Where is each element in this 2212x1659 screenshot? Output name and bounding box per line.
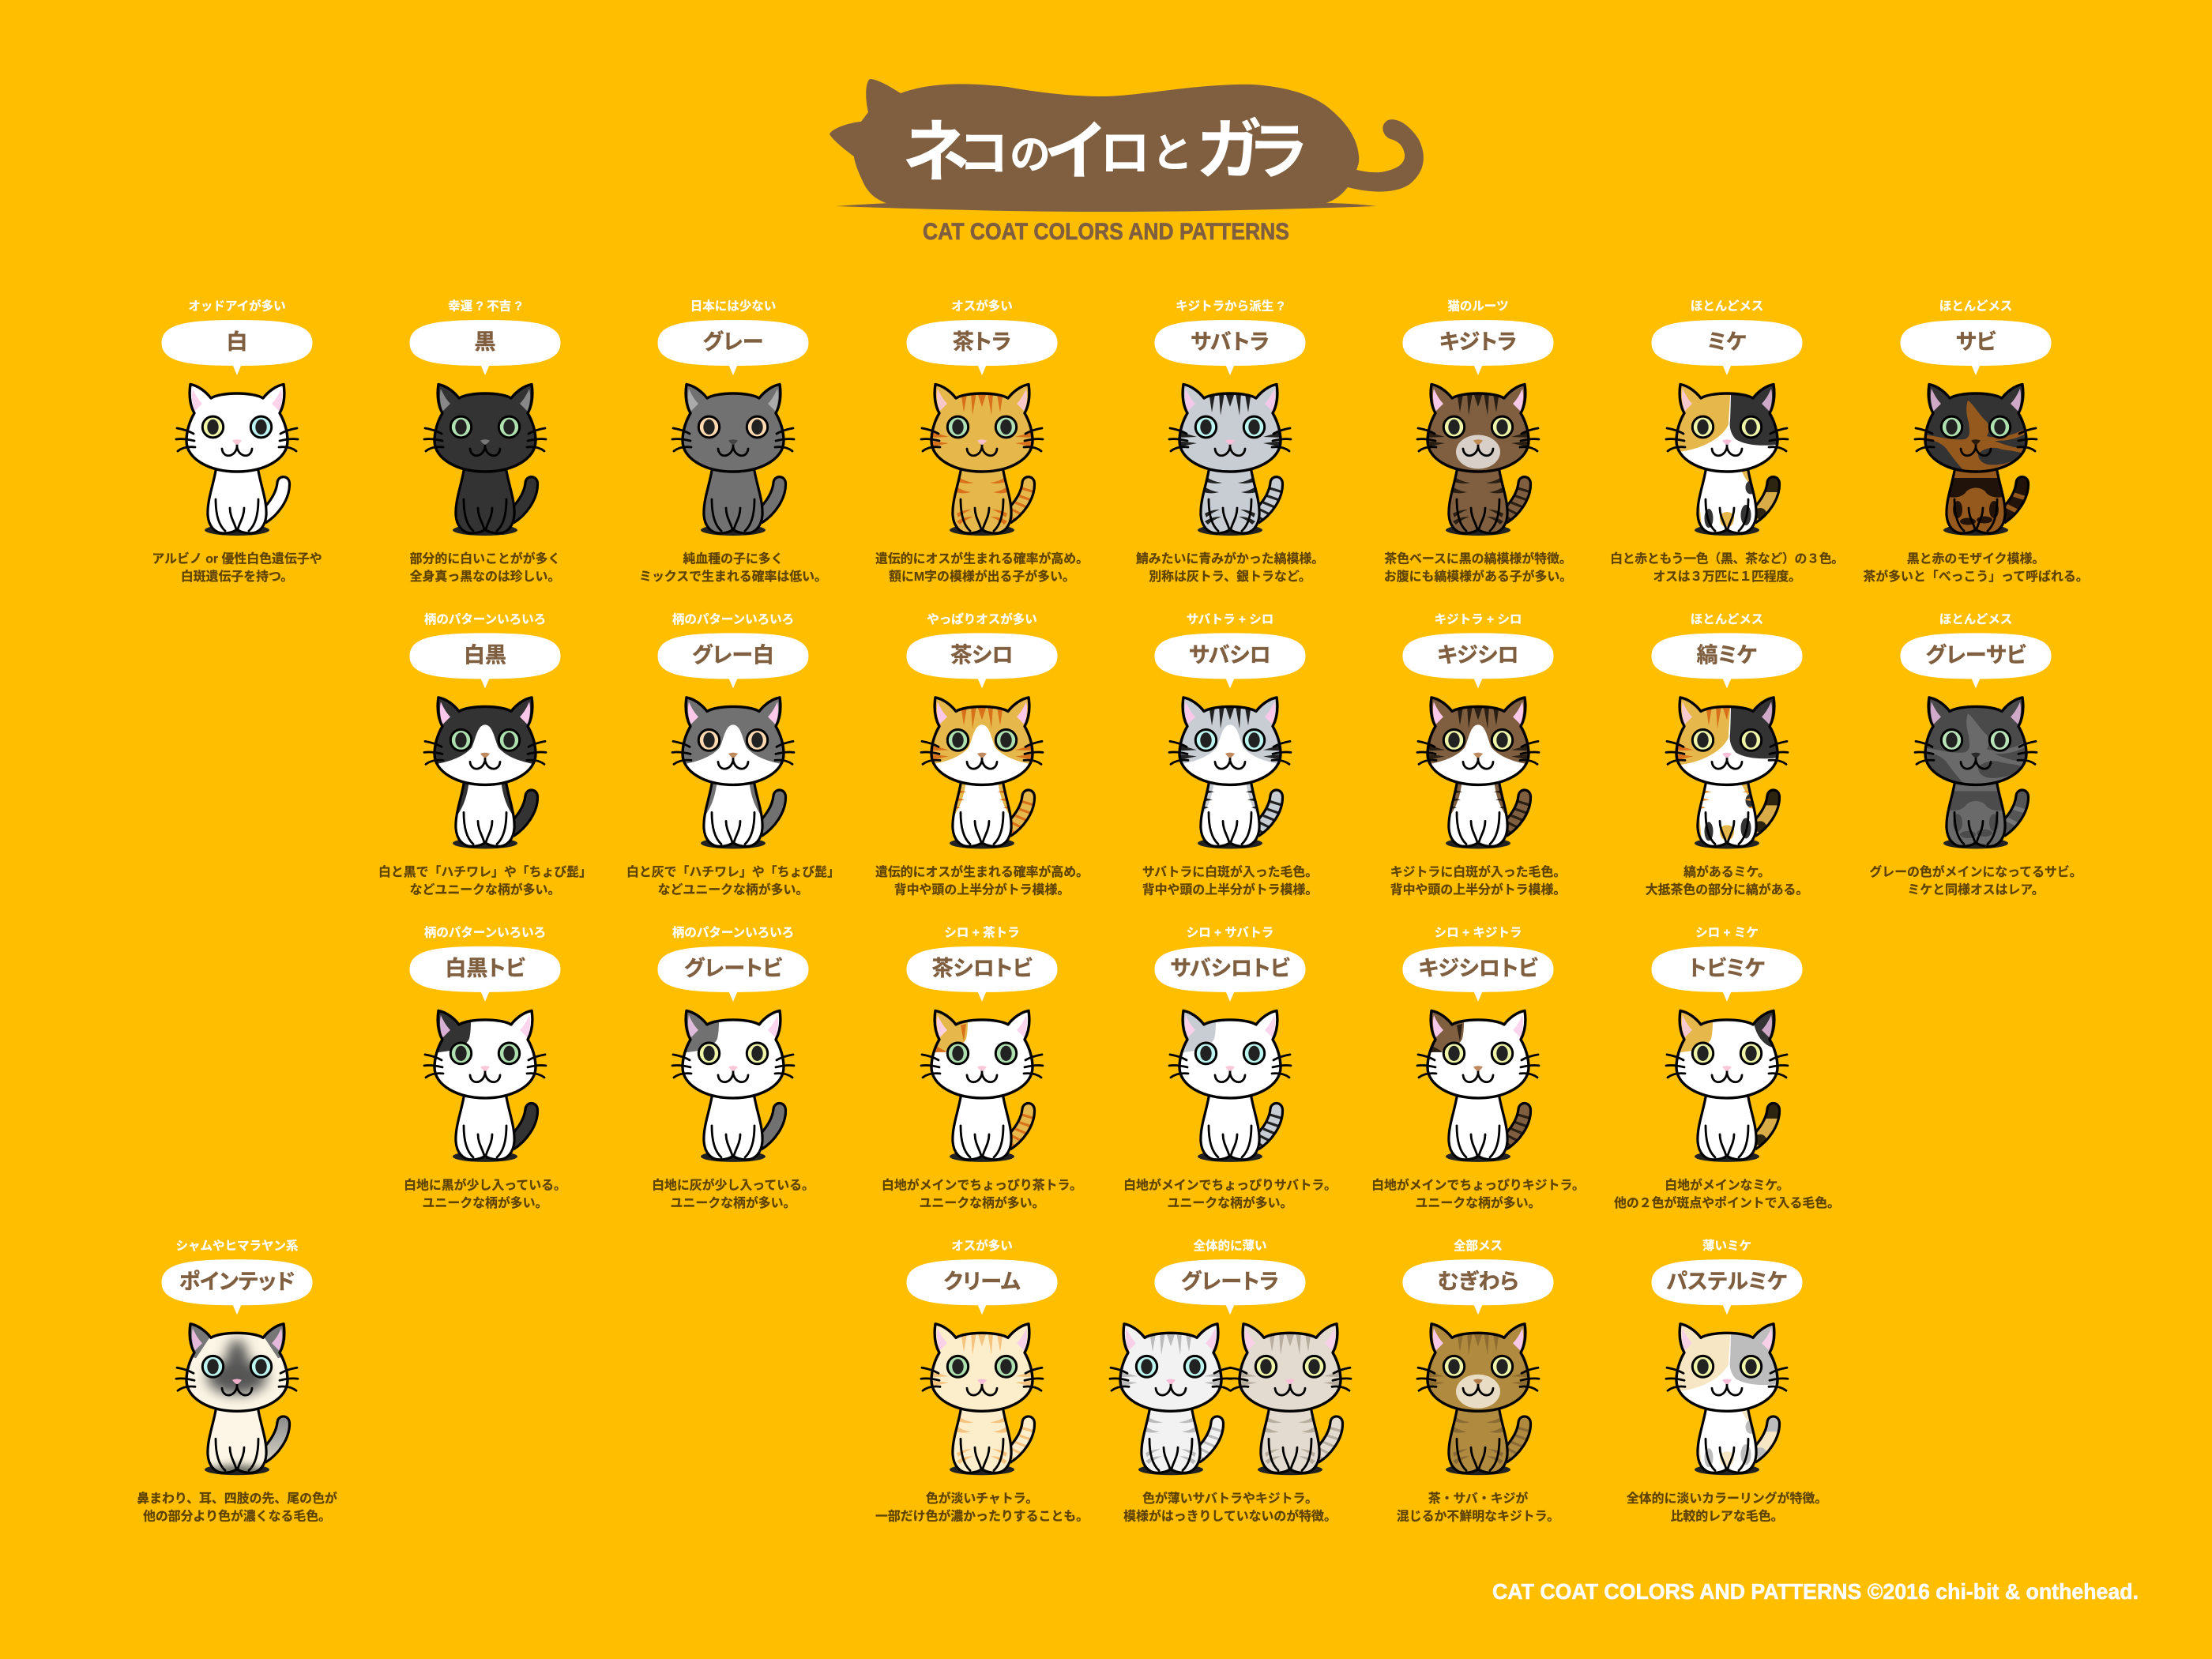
- name bubble: キジシロ: [1437, 643, 1519, 667]
- card: サビ: [1863, 299, 2089, 584]
- cat: silver tabby: [1169, 384, 1291, 536]
- name bubble: ポインテッド: [179, 1270, 295, 1293]
- subtitle: CAT COAT COLORS AND PATTERNS: [923, 219, 1289, 245]
- note: 柄のパターンいろいろ: [672, 612, 794, 626]
- note: オッドアイが多い: [188, 299, 286, 313]
- name bubble: 白黒トビ: [445, 957, 525, 980]
- description: お腹にも縞模様がある子が多い。: [1384, 569, 1572, 584]
- card: グレー白: [626, 612, 840, 897]
- name bubble: パステルミケ: [1666, 1270, 1788, 1293]
- note: ほとんどメス: [1939, 612, 2012, 626]
- card: キジシロトビ: [1371, 926, 1585, 1210]
- name bubble: [907, 946, 1057, 1002]
- description: 背中や頭の上半分がトラ模様。: [1390, 882, 1566, 897]
- cat: white with brown cap: [1417, 1006, 1539, 1162]
- name bubble: トビミケ: [1689, 957, 1765, 980]
- name bubble: キジシロトビ: [1418, 957, 1538, 980]
- description: 白と灰で「ハチワレ」や「ちょび髭」: [626, 865, 840, 879]
- name bubble: [161, 320, 313, 375]
- description: 全体的に淡いカラーリングが特徴。: [1627, 1491, 1827, 1506]
- card: グレーサビ: [1869, 612, 2082, 897]
- description: 黒と赤のモザイク模様。: [1907, 551, 2045, 566]
- name bubble: [657, 320, 809, 375]
- card: 黒: [409, 299, 561, 584]
- cat: straw tabby: [1417, 1324, 1539, 1475]
- title text: コ: [958, 113, 1009, 186]
- description: ユニークな柄が多い。: [920, 1195, 1044, 1210]
- cat: gray: [672, 384, 794, 536]
- card: 白: [152, 299, 322, 584]
- name bubble: グレー: [703, 329, 763, 354]
- note: 薄いミケ: [1702, 1239, 1751, 1253]
- card: トビミケ: [1614, 925, 1840, 1210]
- note: シロ + サバトラ: [1187, 925, 1273, 939]
- title text: ロ: [1100, 113, 1150, 186]
- note: 全部メス: [1454, 1238, 1503, 1253]
- description: 白地がメインでちょっぴり茶トラ。: [882, 1177, 1082, 1192]
- name bubble: 茶トラ: [953, 330, 1011, 354]
- description: 縞があるミケ。: [1683, 864, 1770, 879]
- name bubble: クリーム: [943, 1270, 1021, 1293]
- title text: ガ: [1196, 97, 1262, 193]
- name bubble: [1403, 1259, 1553, 1315]
- note: サバトラ + シロ: [1187, 612, 1273, 626]
- cat: pointed: [176, 1320, 298, 1482]
- description: 背中や頭の上半分がトラ模様。: [1142, 882, 1318, 897]
- cat: white with gray cap: [672, 1006, 794, 1162]
- title text: と: [1152, 120, 1193, 179]
- card: ミケ: [1610, 299, 1844, 584]
- description: 他の部分より色が濃くなる毛色。: [143, 1508, 331, 1523]
- description: ミケと同様オスはレア。: [1907, 882, 2045, 897]
- description: 茶が多いと「べっこう」って呼ばれる。: [1863, 569, 2089, 584]
- card: むぎわら: [1397, 1238, 1559, 1523]
- name bubble: [1651, 946, 1803, 1002]
- name bubble: [1155, 1259, 1305, 1315]
- description: 色が薄いサバトラやキジトラ。: [1142, 1491, 1318, 1506]
- footer credit: CAT COAT COLORS AND PATTERNS ©2016 chi-bit & onthehead.: [1492, 1579, 2139, 1604]
- card: キジトラ: [1384, 299, 1572, 584]
- description: 全身真っ黒なのは珍しい。: [410, 569, 560, 584]
- name bubble: [409, 946, 561, 1002]
- name bubble: [1901, 320, 2051, 375]
- name bubble: 白黒: [464, 643, 506, 667]
- note: オスが多い: [951, 1238, 1013, 1253]
- cat: pale silver tabby: [1110, 1324, 1232, 1475]
- description: サバトラに白斑が入った毛色。: [1142, 864, 1318, 879]
- name bubble: むぎわら: [1438, 1269, 1518, 1293]
- card: グレー: [639, 299, 827, 584]
- note: ほとんどメス: [1691, 299, 1763, 313]
- note: キジトラ + シロ: [1435, 613, 1522, 626]
- name bubble: サバシロ: [1189, 643, 1271, 667]
- note: シロ + 茶トラ: [944, 925, 1020, 939]
- card: パステルミケ: [1627, 1239, 1827, 1523]
- name bubble: [1403, 633, 1553, 688]
- card: 茶シロトビ: [882, 925, 1082, 1210]
- description: オスは３万匹に１匹程度。: [1653, 569, 1801, 584]
- description: 白地に黒が少し入っている。: [404, 1177, 566, 1192]
- note: 全体的に薄い: [1193, 1238, 1267, 1253]
- note: オスが多い: [951, 299, 1013, 313]
- name bubble: 茶シロトビ: [932, 957, 1033, 980]
- card: 白黒トビ: [404, 925, 566, 1210]
- name bubble: グレートビ: [684, 956, 783, 980]
- name bubble: グレー白: [692, 642, 774, 667]
- cat: white with orange cap: [921, 1006, 1043, 1162]
- name bubble: [907, 633, 1057, 688]
- description: 白と赤ともう一色（黒、茶など）の３色。: [1610, 551, 1844, 566]
- description: 部分的に白いことがが多く: [410, 551, 560, 566]
- card: 縞ミケ: [1646, 612, 1808, 897]
- card: 茶トラ: [875, 299, 1089, 584]
- name bubble: サバシロトビ: [1170, 957, 1290, 980]
- note: 柄のパターンいろいろ: [424, 925, 546, 939]
- description: 模様がはっきりしていないのが特徴。: [1123, 1508, 1337, 1523]
- note: キジトラから派生 ?: [1176, 299, 1285, 313]
- note: 猫のルーツ: [1447, 299, 1509, 313]
- name bubble: 白: [226, 330, 248, 354]
- title text: イ: [1044, 99, 1108, 193]
- name bubble: ミケ: [1707, 330, 1747, 354]
- note: 柄のパターンいろいろ: [672, 925, 794, 939]
- name bubble: [1155, 320, 1305, 375]
- name bubble: グレーサビ: [1926, 642, 2026, 667]
- note: 柄のパターンいろいろ: [424, 612, 546, 626]
- title text: ラ: [1247, 103, 1309, 191]
- note: 幸運 ? 不吉 ?: [448, 299, 522, 313]
- cat: black: [424, 384, 546, 536]
- name bubble: 茶シロ: [950, 643, 1014, 667]
- name bubble: [657, 633, 809, 688]
- title text: ネ: [902, 96, 970, 195]
- name bubble: [907, 320, 1057, 375]
- description: 大抵茶色の部分に縞がある。: [1646, 882, 1808, 897]
- name bubble: キジトラ: [1439, 330, 1517, 354]
- description: 茶・サバ・キジが: [1428, 1491, 1528, 1506]
- cat: orange tabby: [921, 384, 1043, 536]
- cat: cream: [921, 1324, 1043, 1475]
- description: などユニークな柄が多い。: [410, 882, 560, 897]
- description: 鼻まわり、耳、四肢の先、尾の色が: [137, 1491, 337, 1506]
- description: 純血種の子に多く: [683, 551, 784, 566]
- name bubble: サバトラ: [1191, 330, 1270, 354]
- card: 白黒: [378, 612, 592, 897]
- name bubble: グレートラ: [1181, 1269, 1279, 1293]
- note: やっぱりオスが多い: [927, 611, 1037, 626]
- description: 混じるか不鮮明なキジトラ。: [1397, 1509, 1559, 1523]
- description: 白地に灰が少し入っている。: [652, 1177, 814, 1192]
- note: 日本には少ない: [690, 299, 776, 313]
- cat: white: [176, 384, 298, 536]
- card: 茶シロ: [875, 611, 1089, 897]
- description: 白地がメインなミケ。: [1665, 1177, 1789, 1192]
- description: ミックスで生まれる確率は低い。: [639, 569, 827, 584]
- note: シロ + キジトラ: [1435, 926, 1522, 939]
- name bubble: [1651, 320, 1803, 375]
- card: クリーム: [875, 1238, 1089, 1523]
- description: 色が淡いチャトラ。: [926, 1491, 1038, 1506]
- description: 白と黒で「ハチワレ」や「ちょび髭」: [378, 865, 592, 879]
- description: 他の２色が斑点やポイントで入る毛色。: [1614, 1195, 1840, 1210]
- note: シロ + ミケ: [1695, 925, 1759, 939]
- description: 比較的レアな毛色。: [1670, 1508, 1784, 1523]
- name bubble: [1403, 320, 1553, 375]
- description: 額にM字の模様が出る子が多い。: [889, 569, 1075, 584]
- card: グレートビ: [652, 925, 814, 1210]
- card: サバシロトビ: [1123, 925, 1337, 1210]
- cat: orange and white: [921, 692, 1043, 848]
- description: ユニークな柄が多い。: [1168, 1195, 1292, 1210]
- cat: brown tabby: [1417, 384, 1539, 536]
- name bubble: [907, 1259, 1057, 1315]
- name bubble: [657, 946, 809, 1002]
- cat: white with silver cap: [1169, 1006, 1291, 1162]
- description: 鯖みたいに青みがかった縞模様。: [1136, 551, 1324, 566]
- cat: brown tabby and white: [1417, 692, 1539, 848]
- name bubble: 黒: [474, 330, 496, 354]
- description: 別称は灰トラ、銀トラなど。: [1149, 570, 1311, 584]
- cat: white with calico spots: [1666, 1006, 1788, 1162]
- description: 茶色ベースに黒の縞模様が特徴。: [1384, 551, 1572, 566]
- description: などユニークな柄が多い。: [658, 882, 808, 897]
- card: ポインテッド: [137, 1239, 337, 1523]
- banner ground shadow: [836, 202, 1376, 212]
- card: キジシロ: [1390, 613, 1566, 897]
- cat: gray tortoiseshell: [1915, 698, 2037, 848]
- description: 白地がメインでちょっぴりキジトラ。: [1371, 1177, 1585, 1192]
- description: グレーの色がメインになってるサビ。: [1869, 864, 2082, 879]
- cat: striped calico: [1666, 692, 1788, 848]
- description: 白地がメインでちょっぴりサバトラ。: [1123, 1177, 1337, 1192]
- note: シャムやヒマラヤン系: [175, 1239, 299, 1253]
- name bubble: [1403, 946, 1553, 1002]
- description: アルビノ or 優性白色遺伝子や: [152, 551, 322, 566]
- description: ユニークな柄が多い。: [1416, 1195, 1540, 1210]
- card: グレートラ: [1110, 1238, 1351, 1523]
- name bubble: [1651, 633, 1803, 688]
- cat: black and white: [424, 692, 546, 848]
- description: 遺伝的にオスが生まれる確率が高め。: [875, 864, 1089, 879]
- title block: [830, 79, 1424, 245]
- name bubble: [1901, 633, 2051, 688]
- card: サバトラ: [1136, 299, 1324, 584]
- description: キジトラに白斑が入った毛色。: [1390, 864, 1566, 879]
- description: ユニークな柄が多い。: [423, 1195, 547, 1210]
- note: ほとんどメス: [1939, 299, 2012, 313]
- cat: white with black cap: [424, 1006, 546, 1162]
- description: ユニークな柄が多い。: [671, 1195, 796, 1210]
- card: サバシロ: [1142, 612, 1318, 897]
- cat: tortoiseshell: [1915, 384, 2037, 536]
- name bubble: [409, 320, 561, 375]
- cat: pale brown tabby: [1229, 1324, 1351, 1475]
- cat silhouette banner: [830, 79, 1424, 204]
- name bubble: [161, 1259, 313, 1315]
- name bubble: [409, 633, 561, 688]
- description: 白斑遺伝子を持つ。: [181, 570, 293, 584]
- cat: gray and white: [672, 692, 794, 848]
- description: 背中や頭の上半分がトラ模様。: [894, 882, 1070, 897]
- title text: の: [1010, 122, 1051, 181]
- name bubble: [1651, 1259, 1803, 1315]
- cat: calico: [1666, 379, 1788, 536]
- name bubble: [1155, 633, 1305, 688]
- name bubble: サビ: [1956, 330, 1996, 354]
- description: 遺伝的にオスが生まれる確率が高め。: [875, 551, 1089, 566]
- cat: pastel calico: [1666, 1319, 1788, 1475]
- description: 一部だけ色が濃かったりすることも。: [875, 1508, 1089, 1523]
- name bubble: [1155, 946, 1305, 1002]
- name bubble: 縞ミケ: [1697, 643, 1757, 667]
- note: ほとんどメス: [1691, 612, 1763, 626]
- cat: silver and white: [1169, 692, 1291, 848]
